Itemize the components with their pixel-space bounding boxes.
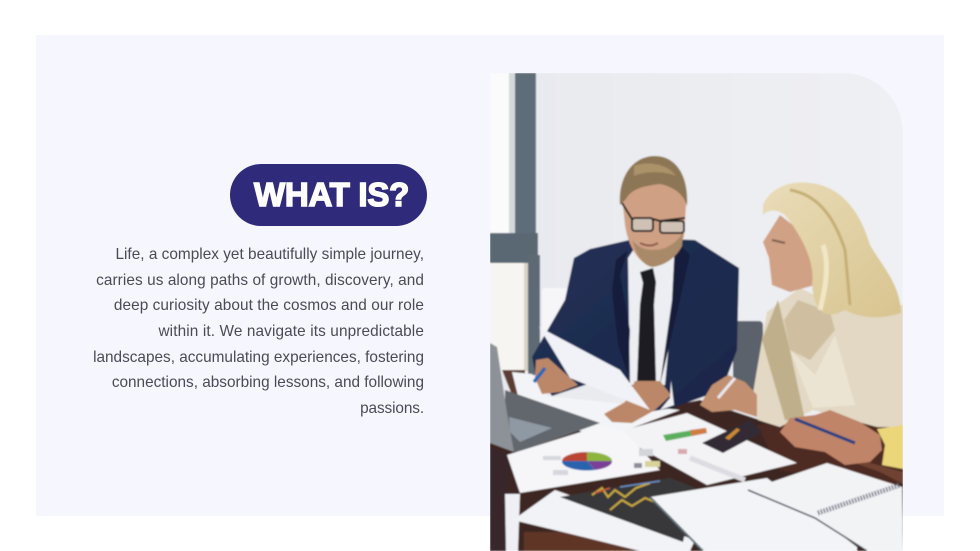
table [490, 370, 903, 551]
clasped hands [780, 410, 882, 465]
blue pen [534, 368, 545, 382]
shirt cuff [660, 380, 674, 410]
window [490, 73, 540, 375]
report with pie chart [507, 426, 660, 493]
left paper stack [505, 494, 520, 551]
text block: description: passions. [360, 400, 424, 417]
smartphone [702, 420, 762, 453]
stock chart sheet [560, 478, 695, 542]
text block: description: deep curiosity about the cosmos and our role [114, 297, 424, 314]
photo: business meeting illustration [490, 73, 903, 551]
man's hands [535, 358, 671, 423]
title: WHAT IS? [254, 176, 409, 213]
lower left papers [513, 490, 695, 551]
radiator [542, 288, 568, 338]
woman's hand with pencil [700, 375, 757, 417]
woman [753, 182, 903, 427]
text block: description: landscapes, accumulating experiences, fostering [93, 349, 424, 366]
paper held by man [539, 327, 650, 410]
text block: description: Life, a complex yet beautifully simple journey, [115, 246, 424, 263]
spiral notebook [748, 463, 903, 551]
document with ring edge [650, 478, 857, 551]
chair [733, 321, 763, 396]
laptop [490, 343, 600, 453]
text block: description: connections, absorbing lessons, and following [112, 374, 424, 391]
heading pill [230, 164, 427, 226]
table papers behind laptop [512, 372, 680, 440]
man [532, 156, 739, 412]
report with bar chart [622, 412, 798, 486]
yellow sleeve [877, 425, 903, 469]
text block: description: carries us along paths of growth, discovery, and [96, 272, 424, 289]
pen in hand [795, 419, 855, 443]
text block: description [93, 246, 424, 417]
wall [502, 73, 902, 420]
text block: description: within it. We navigate its unpredictable [158, 323, 424, 340]
